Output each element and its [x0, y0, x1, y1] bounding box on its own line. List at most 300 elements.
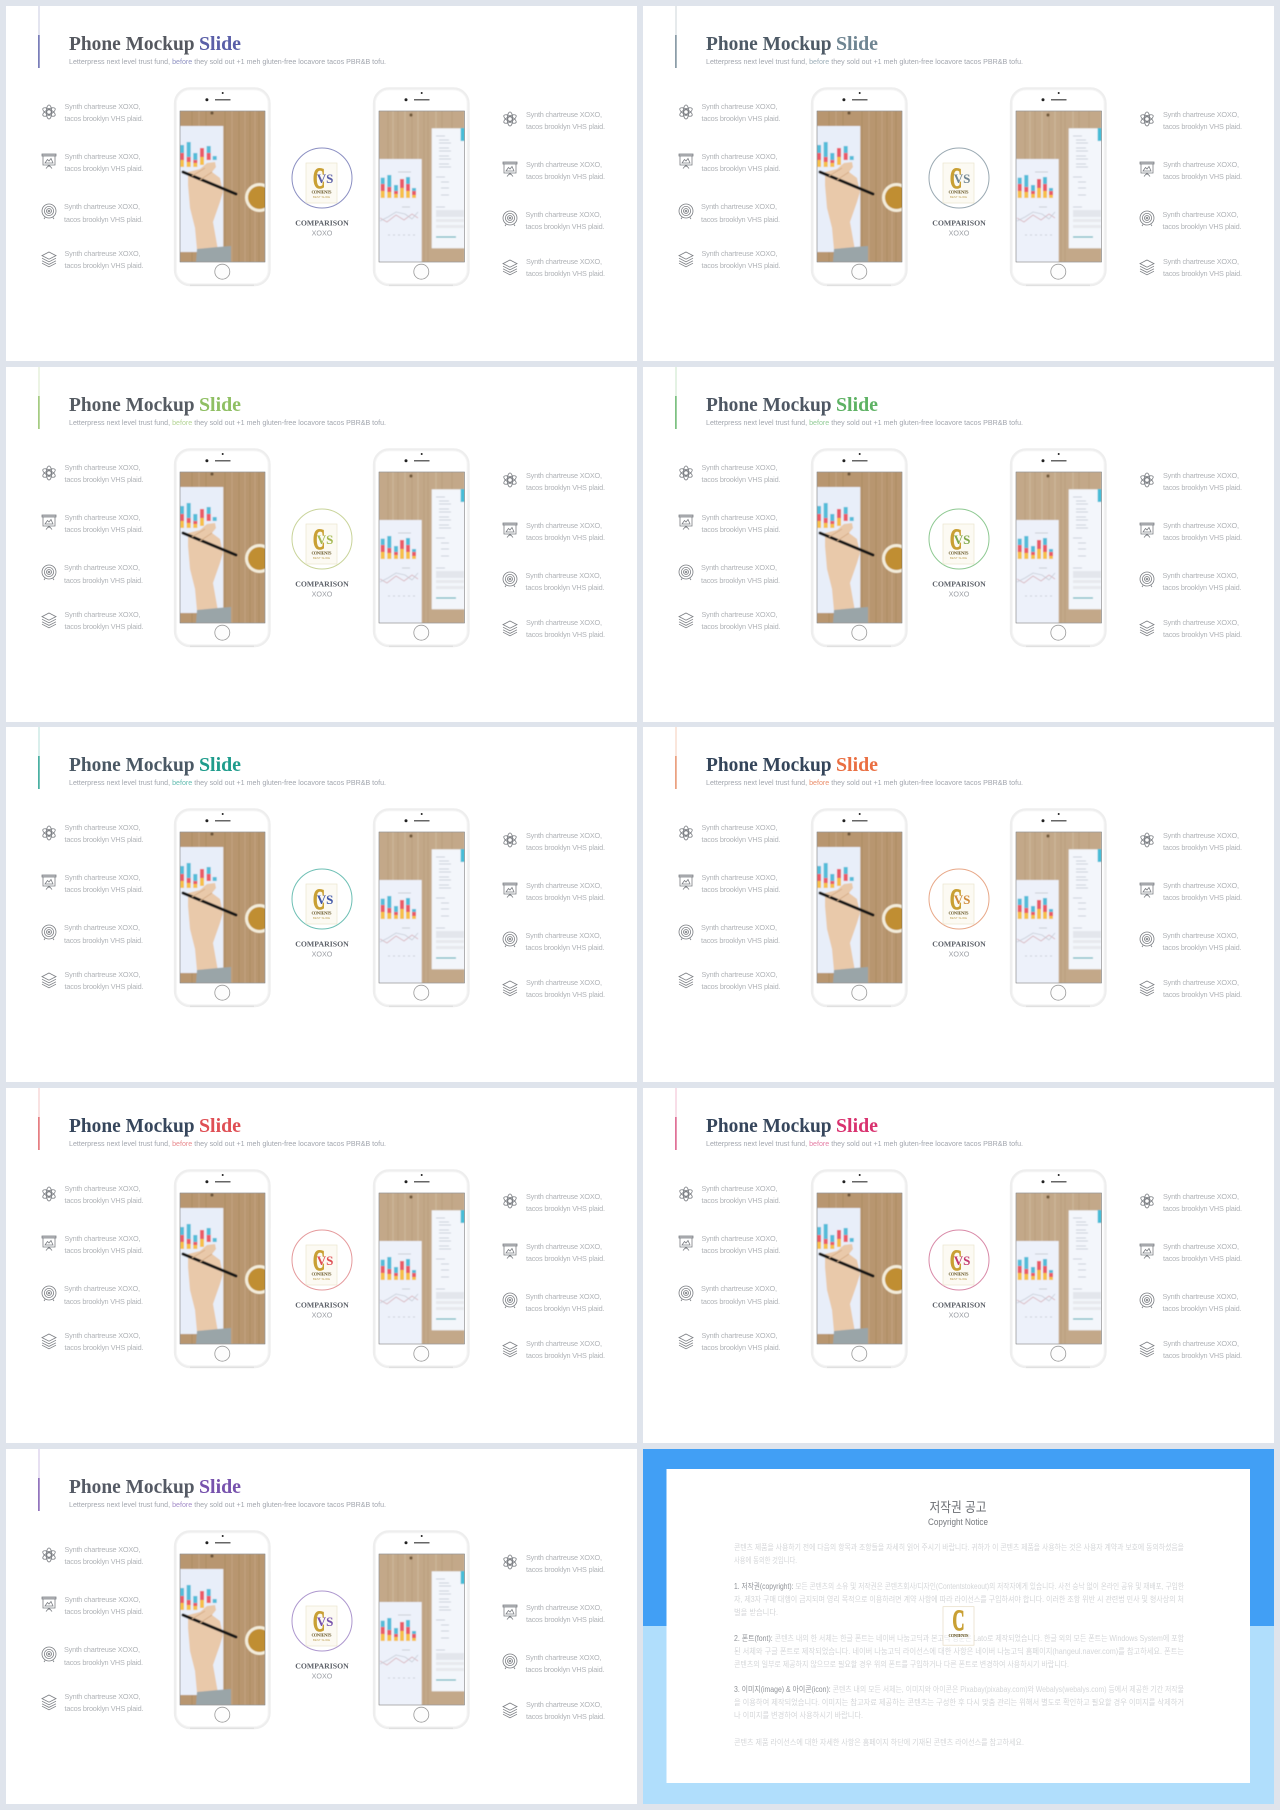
right feature list: tacos brooklyn VHS plaid.: [526, 1304, 604, 1313]
vs badge: C: [950, 523, 962, 556]
right feature list: tacos brooklyn VHS plaid.: [1163, 990, 1242, 999]
right feature list: tacos brooklyn VHS plaid.: [526, 1204, 605, 1213]
right feature list: Synth chartreuse XOXO,: [1162, 931, 1238, 940]
vs badge: BEST SLIDE: [313, 916, 330, 920]
phone: hand drawing chart: [174, 1532, 274, 1728]
left feature list: Synth chartreuse XOXO,: [64, 102, 140, 111]
vs badge: VS: [954, 171, 970, 186]
panel: slide 2 slate: [643, 6, 1274, 361]
left feature list: Synth chartreuse XOXO,: [64, 1284, 140, 1293]
contents logo: CONTENTS: [948, 1633, 969, 1638]
phone: paper report: [373, 1170, 470, 1367]
vs badge: VS: [954, 532, 970, 547]
vs badge: CONTENTS: [948, 190, 969, 194]
comparison label: [295, 940, 349, 958]
left feature list: tacos brooklyn VHS plaid.: [702, 622, 780, 631]
phone: hand drawing chart: [811, 1170, 911, 1367]
heading: Slide: [199, 1476, 241, 1498]
right feature list: tacos brooklyn VHS plaid.: [526, 222, 604, 231]
right feature list: Synth chartreuse XOXO,: [1163, 1242, 1239, 1251]
vs badge: BEST SLIDE: [313, 195, 330, 199]
right feature list: [1140, 1192, 1242, 1360]
left feature list: tacos brooklyn VHS plaid.: [64, 1658, 143, 1667]
vs badge: [929, 509, 989, 569]
copyright clause 1: 1. 저작권(copyright): 모든 콘텐츠의 소유 및 저작권은 콘텐츠회사/디자인(Contentstokeout)의 저작자에게 있습니다. 사전 승낙 없이 온라인 공유 및 재배포, 구입한: [734, 1581, 1185, 1591]
contents logo: [943, 1604, 974, 1645]
comparison label: [295, 580, 349, 598]
vs badge: CONTENTS: [948, 1272, 969, 1276]
left feature list: Synth chartreuse XOXO,: [702, 152, 778, 161]
phone: paper report: [373, 1532, 470, 1728]
right feature list: Synth chartreuse XOXO,: [1163, 1339, 1239, 1348]
copyright clause 3: 을 이용하여 제작되었습니다. 이미지는 참고자료 제공하는 콘텐츠는 구성한 후 다시 맞춤 관리는 위해서 별도로 확인하고 필요할 경우 이미지를 삭제하거: [734, 1697, 1184, 1707]
contents logo: C: [952, 1604, 964, 1637]
right feature list: Synth chartreuse XOXO,: [526, 521, 602, 530]
left feature list: Synth chartreuse XOXO,: [64, 970, 140, 979]
vs badge: CONTENTS: [948, 910, 969, 916]
left feature list: tacos brooklyn VHS plaid.: [64, 475, 144, 484]
copyright clause 1: 자, 제3자 구매 대행이 금지되며 영리 목적으로 이용하려면 계약 사항에 따라 라이선스를 구입하셔야 합니다. 이러한 조항 위반 시 관련법 민사 및 형사상의 처: [734, 1594, 1184, 1604]
left feature list: [679, 102, 780, 270]
left feature list: [42, 463, 143, 631]
right feature list: tacos brooklyn VHS plaid.: [1163, 483, 1242, 492]
phone: paper report: [1010, 88, 1107, 285]
left feature list: Synth chartreuse XOXO,: [701, 1284, 777, 1293]
vs badge: [292, 148, 352, 208]
right feature list: tacos brooklyn VHS plaid.: [1163, 843, 1242, 852]
left feature list: tacos brooklyn VHS plaid.: [64, 936, 143, 945]
right feature list: Synth chartreuse XOXO,: [1163, 521, 1239, 530]
phone: paper report: [1010, 810, 1107, 1006]
left feature list: tacos brooklyn VHS plaid.: [64, 1607, 144, 1616]
vs badge: BEST SLIDE: [313, 1277, 330, 1281]
heading: Slide: [199, 33, 241, 55]
panel: slide 5 teal: [6, 727, 637, 1082]
vs badge: C: [313, 1605, 325, 1638]
comparison label: COMPARISON: [295, 1662, 349, 1670]
subtitle: Letterpress next level trust fund, before they sold out +1 meh gluten-free locavore tacos PBR&B tofu.: [706, 1141, 1023, 1148]
comparison label: [295, 1300, 349, 1320]
phone: paper report: [373, 450, 470, 646]
comparison label: XOXO: [949, 1310, 970, 1320]
subtitle: Letterpress next level trust fund, before they sold out +1 meh gluten-free locavore tacos PBR&B tofu.: [69, 1141, 386, 1148]
right feature list: Synth chartreuse XOXO,: [526, 1603, 602, 1612]
left feature list: tacos brooklyn VHS plaid.: [64, 576, 143, 585]
right feature list: [503, 831, 605, 999]
right feature list: tacos brooklyn VHS plaid.: [526, 893, 605, 902]
vs badge: C: [950, 162, 962, 195]
comparison label: [932, 580, 986, 598]
left feature list: [679, 823, 780, 991]
comparison label: XOXO: [312, 228, 333, 238]
left feature list: Synth chartreuse XOXO,: [64, 463, 140, 472]
comparison label: [932, 1300, 986, 1320]
right feature list: Synth chartreuse XOXO,: [526, 1553, 602, 1562]
left feature list: Synth chartreuse XOXO,: [701, 923, 777, 932]
vs badge: BEST SLIDE: [950, 916, 967, 920]
left feature list: tacos brooklyn VHS plaid.: [64, 1343, 144, 1352]
left feature list: tacos brooklyn VHS plaid.: [64, 261, 144, 270]
left feature list: Synth chartreuse XOXO,: [702, 249, 778, 258]
vs badge: [292, 509, 352, 569]
right feature list: Synth chartreuse XOXO,: [526, 831, 602, 840]
heading: Slide: [836, 33, 878, 55]
copyright heading: [928, 1500, 988, 1527]
left feature list: tacos brooklyn VHS plaid.: [702, 1246, 780, 1255]
phone: paper report: [1010, 450, 1107, 646]
panel: slide 9 purple: [6, 1449, 637, 1804]
right feature list: Synth chartreuse XOXO,: [526, 110, 602, 119]
right feature list: tacos brooklyn VHS plaid.: [1163, 1254, 1242, 1263]
left feature list: Synth chartreuse XOXO,: [701, 202, 777, 211]
left feature list: tacos brooklyn VHS plaid.: [64, 525, 144, 534]
left feature list: [679, 463, 780, 631]
left feature list: tacos brooklyn VHS plaid.: [64, 114, 144, 123]
comparison label: XOXO: [949, 228, 970, 238]
vs badge: [292, 1230, 352, 1290]
left feature list: tacos brooklyn VHS plaid.: [702, 114, 780, 123]
right feature list: Synth chartreuse XOXO,: [1163, 618, 1239, 627]
right feature list: Synth chartreuse XOXO,: [526, 1242, 602, 1251]
heading: Slide: [199, 394, 241, 416]
left feature list: [679, 1184, 780, 1352]
panel: slide 1 indigo: [6, 6, 637, 361]
right feature list: Synth chartreuse XOXO,: [526, 257, 602, 266]
left feature list: Synth chartreuse XOXO,: [64, 152, 140, 161]
comparison label: COMPARISON: [932, 940, 986, 948]
panel: slide 7 red: [6, 1088, 637, 1443]
phone: paper report: [373, 88, 470, 285]
right feature list: tacos brooklyn VHS plaid.: [1163, 269, 1242, 278]
right feature list: tacos brooklyn VHS plaid.: [1163, 172, 1242, 181]
right feature list: tacos brooklyn VHS plaid.: [1163, 1204, 1242, 1213]
vs badge: CONTENTS: [312, 550, 332, 556]
phone: hand drawing chart: [174, 1170, 274, 1367]
vs badge: [929, 1230, 989, 1290]
heading: Phone Mockup: [69, 1115, 195, 1137]
right feature list: tacos brooklyn VHS plaid.: [1162, 583, 1242, 592]
comparison label: [932, 218, 986, 238]
panel: slide 4 green: [643, 367, 1274, 722]
left feature list: Synth chartreuse XOXO,: [64, 1645, 140, 1654]
right feature list: tacos brooklyn VHS plaid.: [1163, 893, 1242, 902]
left feature list: [42, 1184, 143, 1352]
phone: hand drawing chart: [811, 810, 911, 1006]
right feature list: tacos brooklyn VHS plaid.: [526, 1565, 605, 1574]
vs badge: VS: [317, 1614, 333, 1629]
right feature list: Synth chartreuse XOXO,: [526, 1292, 602, 1301]
right feature list: Synth chartreuse XOXO,: [1163, 110, 1239, 119]
subtitle: Letterpress next level trust fund, before they sold out +1 meh gluten-free locavore tacos PBR&B tofu.: [69, 420, 386, 427]
vs badge: C: [313, 883, 325, 916]
left feature list: tacos brooklyn VHS plaid.: [702, 982, 780, 991]
right feature list: Synth chartreuse XOXO,: [526, 978, 602, 987]
right feature list: tacos brooklyn VHS plaid.: [526, 1351, 605, 1360]
left feature list: Synth chartreuse XOXO,: [64, 249, 140, 258]
left feature list: tacos brooklyn VHS plaid.: [701, 1297, 780, 1306]
vs badge: VS: [954, 1253, 970, 1268]
left feature list: Synth chartreuse XOXO,: [702, 1234, 778, 1243]
right feature list: [503, 1192, 605, 1360]
left feature list: tacos brooklyn VHS plaid.: [64, 1196, 144, 1205]
left feature list: tacos brooklyn VHS plaid.: [64, 1297, 143, 1306]
right feature list: tacos brooklyn VHS plaid.: [1163, 1351, 1242, 1360]
heading: Phone Mockup: [706, 1115, 832, 1137]
left feature list: [42, 1545, 143, 1713]
left feature list: Synth chartreuse XOXO,: [702, 610, 778, 619]
vs badge: CONTENTS: [948, 550, 969, 556]
comparison label: XOXO: [949, 950, 970, 958]
phone: hand drawing chart: [174, 810, 274, 1006]
right feature list: Synth chartreuse XOXO,: [1163, 160, 1239, 169]
left feature list: Synth chartreuse XOXO,: [64, 513, 140, 522]
copyright clause 2: 된 서체와 구글 폰트로 제작되었습니다. 네이버 나눔고딕 라이선스에 대한 사항은 네이버 나눔고딕 홈페이지(hangeul.naver.com)를 참고하세요. 폰트는: [734, 1646, 1184, 1656]
right feature list: tacos brooklyn VHS plaid.: [526, 269, 605, 278]
vs badge: VS: [954, 892, 970, 907]
right feature list: Synth chartreuse XOXO,: [1162, 571, 1238, 580]
right feature list: Synth chartreuse XOXO,: [1162, 210, 1238, 219]
right feature list: [503, 1553, 605, 1721]
right feature list: Synth chartreuse XOXO,: [526, 1339, 602, 1348]
vs badge: [929, 148, 989, 208]
right feature list: tacos brooklyn VHS plaid.: [1163, 122, 1242, 131]
heading: Slide: [199, 754, 241, 776]
comparison label: COMPARISON: [295, 940, 349, 948]
right feature list: tacos brooklyn VHS plaid.: [526, 1712, 605, 1721]
left feature list: [42, 823, 143, 991]
left feature list: Synth chartreuse XOXO,: [702, 102, 778, 111]
left feature list: tacos brooklyn VHS plaid.: [64, 835, 144, 844]
right feature list: Synth chartreuse XOXO,: [526, 1700, 602, 1709]
right feature list: tacos brooklyn VHS plaid.: [526, 583, 604, 592]
right feature list: tacos brooklyn VHS plaid.: [526, 483, 605, 492]
left feature list: tacos brooklyn VHS plaid.: [702, 525, 780, 534]
vs badge: VS: [317, 532, 333, 547]
panel: copyright notice: [643, 1449, 1274, 1804]
right feature list: Synth chartreuse XOXO,: [526, 210, 602, 219]
left feature list: Synth chartreuse XOXO,: [702, 873, 778, 882]
vs badge: CONTENTS: [312, 910, 332, 916]
left feature list: tacos brooklyn VHS plaid.: [702, 261, 780, 270]
vs badge: [292, 1591, 352, 1651]
heading: Phone Mockup: [69, 394, 195, 416]
vs badge: BEST SLIDE: [313, 1638, 330, 1642]
left feature list: tacos brooklyn VHS plaid.: [64, 1704, 144, 1713]
subtitle: Letterpress next level trust fund, before they sold out +1 meh gluten-free locavore tacos PBR&B tofu.: [69, 780, 386, 787]
right feature list: Synth chartreuse XOXO,: [526, 1653, 602, 1662]
comparison label: XOXO: [312, 590, 333, 598]
vs badge: CONTENTS: [312, 1632, 332, 1638]
phone: paper report: [1010, 1170, 1107, 1367]
right feature list: Synth chartreuse XOXO,: [1163, 471, 1239, 480]
right feature list: tacos brooklyn VHS plaid.: [526, 843, 605, 852]
phone: hand drawing chart: [811, 88, 911, 285]
left feature list: tacos brooklyn VHS plaid.: [702, 475, 780, 484]
right feature list: tacos brooklyn VHS plaid.: [526, 1615, 605, 1624]
heading: Phone Mockup: [706, 33, 832, 55]
right feature list: tacos brooklyn VHS plaid.: [526, 1665, 604, 1674]
left feature list: tacos brooklyn VHS plaid.: [701, 936, 780, 945]
copyright clause 3: 3. 이미지(image) & 아이콘(icon): 콘텐츠 내의 모든 서체는, 이미지와 아이콘은 Pixabay(pixabay.com)와 Webalys(webalys.com) 등에서 제공한 기간 저작물: [734, 1684, 1184, 1694]
copyright clause 2: 2. 폰트(font): 콘텐츠 내의 한 서체는 한글 폰트는 네이버 나눔고딕과 본고딕 영문은 Lato로 제작되었습니다. 한글 외의 모든 폰트는 Windows System에 포함: [734, 1633, 1185, 1643]
left feature list: tacos brooklyn VHS plaid.: [64, 885, 144, 894]
left feature list: Synth chartreuse XOXO,: [64, 823, 140, 832]
right feature list: tacos brooklyn VHS plaid.: [526, 943, 604, 952]
copyright clause 1: [734, 1581, 1185, 1617]
subtitle: Letterpress next level trust fund, before they sold out +1 meh gluten-free locavore tacos PBR&B tofu.: [706, 420, 1023, 427]
phone: hand drawing chart: [174, 450, 274, 646]
vs badge: VS: [317, 892, 333, 907]
right feature list: Synth chartreuse XOXO,: [1163, 1192, 1239, 1201]
phone: hand drawing chart: [174, 88, 274, 285]
vs badge: C: [313, 162, 325, 195]
right feature list: Synth chartreuse XOXO,: [1163, 881, 1239, 890]
comparison label: COMPARISON: [295, 218, 349, 228]
vs badge: VS: [317, 171, 333, 186]
comparison label: COMPARISON: [932, 580, 986, 588]
left feature list: tacos brooklyn VHS plaid.: [702, 1343, 780, 1352]
heading: Phone Mockup: [69, 33, 195, 55]
comparison label: XOXO: [312, 1310, 333, 1320]
right feature list: Synth chartreuse XOXO,: [1163, 831, 1239, 840]
right feature list: Synth chartreuse XOXO,: [526, 931, 602, 940]
right feature list: Synth chartreuse XOXO,: [526, 881, 602, 890]
right feature list: tacos brooklyn VHS plaid.: [1162, 222, 1242, 231]
left feature list: Synth chartreuse XOXO,: [701, 563, 777, 572]
phone: hand drawing chart: [811, 450, 911, 646]
copyright heading: Copyright Notice: [928, 1517, 988, 1527]
comparison label: [295, 1662, 349, 1680]
left feature list: tacos brooklyn VHS plaid.: [64, 164, 144, 173]
right feature list: tacos brooklyn VHS plaid.: [526, 990, 605, 999]
left feature list: tacos brooklyn VHS plaid.: [64, 982, 144, 991]
right feature list: tacos brooklyn VHS plaid.: [1162, 1304, 1242, 1313]
subtitle: Letterpress next level trust fund, before they sold out +1 meh gluten-free locavore tacos PBR&B tofu.: [706, 59, 1023, 66]
right feature list: tacos brooklyn VHS plaid.: [1163, 630, 1242, 639]
left feature list: Synth chartreuse XOXO,: [702, 463, 778, 472]
right feature list: [1140, 471, 1242, 639]
right feature list: Synth chartreuse XOXO,: [1163, 978, 1239, 987]
vs badge: [929, 869, 989, 929]
heading: Phone Mockup: [69, 754, 195, 776]
left feature list: Synth chartreuse XOXO,: [64, 1234, 140, 1243]
copyright clause 3: 나 이미지를 변경하여 사용하시기 바랍니다.: [734, 1710, 863, 1720]
vs badge: C: [950, 1244, 962, 1277]
left feature list: [42, 102, 143, 270]
comparison label: COMPARISON: [932, 1300, 986, 1310]
comparison label: [932, 940, 986, 958]
subtitle: Letterpress next level trust fund, before they sold out +1 meh gluten-free locavore tacos PBR&B tofu.: [69, 1502, 386, 1509]
left feature list: tacos brooklyn VHS plaid.: [64, 215, 143, 224]
subtitle: Letterpress next level trust fund, before they sold out +1 meh gluten-free locavore tacos PBR&B tofu.: [69, 59, 386, 66]
left feature list: Synth chartreuse XOXO,: [702, 1331, 778, 1340]
left feature list: Synth chartreuse XOXO,: [64, 610, 140, 619]
left feature list: Synth chartreuse XOXO,: [702, 823, 778, 832]
left feature list: Synth chartreuse XOXO,: [64, 1331, 140, 1340]
right feature list: [1140, 110, 1242, 278]
comparison label: COMPARISON: [295, 580, 349, 588]
left feature list: tacos brooklyn VHS plaid.: [702, 885, 780, 894]
heading: Slide: [836, 754, 878, 776]
right feature list: tacos brooklyn VHS plaid.: [1163, 533, 1242, 542]
left feature list: tacos brooklyn VHS plaid.: [701, 215, 780, 224]
left feature list: tacos brooklyn VHS plaid.: [702, 164, 780, 173]
copyright clause 2: 콘텐츠의 일부로 제공하지 않으므로 필요할 경우 위의 폰트를 구입하거나 다른 폰트로 변경하여 사용하시기 바랍니다.: [734, 1659, 1069, 1669]
panel: slide 6 orange: [643, 727, 1274, 1082]
vs badge: BEST SLIDE: [950, 556, 967, 560]
right feature list: [503, 471, 605, 639]
vs badge: CONTENTS: [312, 190, 332, 194]
left feature list: tacos brooklyn VHS plaid.: [64, 1557, 144, 1566]
heading: Phone Mockup: [69, 1476, 195, 1498]
copyright clause 1: 벌을 받습니다.: [734, 1607, 778, 1617]
right feature list: [503, 110, 605, 278]
copyright intro: 사용에 동의한 것입니다.: [734, 1555, 797, 1565]
heading: Slide: [836, 1115, 878, 1137]
copyright clause 2: [734, 1633, 1185, 1669]
panel: slide 8 pink: [643, 1088, 1274, 1443]
comparison label: XOXO: [312, 950, 333, 958]
right feature list: Synth chartreuse XOXO,: [526, 471, 602, 480]
comparison label: COMPARISON: [932, 218, 986, 228]
right feature list: Synth chartreuse XOXO,: [526, 160, 602, 169]
right feature list: tacos brooklyn VHS plaid.: [526, 122, 605, 131]
heading: Phone Mockup: [706, 754, 832, 776]
right feature list: tacos brooklyn VHS plaid.: [1162, 943, 1242, 952]
left feature list: tacos brooklyn VHS plaid.: [64, 622, 144, 631]
right feature list: tacos brooklyn VHS plaid.: [526, 630, 605, 639]
panel: slide 3 lime: [6, 367, 637, 722]
left feature list: Synth chartreuse XOXO,: [64, 923, 140, 932]
left feature list: Synth chartreuse XOXO,: [702, 513, 778, 522]
comparison label: XOXO: [949, 590, 970, 598]
vs badge: C: [313, 1244, 325, 1277]
vs badge: C: [950, 883, 962, 916]
right feature list: Synth chartreuse XOXO,: [1162, 1292, 1238, 1301]
left feature list: Synth chartreuse XOXO,: [64, 1184, 140, 1193]
vs badge: BEST SLIDE: [950, 195, 967, 199]
copyright heading: 저작권 공고: [930, 1500, 986, 1515]
left feature list: Synth chartreuse XOXO,: [64, 1595, 140, 1604]
right feature list: Synth chartreuse XOXO,: [526, 618, 602, 627]
heading: Slide: [836, 394, 878, 416]
comparison label: XOXO: [312, 1672, 333, 1680]
left feature list: Synth chartreuse XOXO,: [702, 970, 778, 979]
left feature list: Synth chartreuse XOXO,: [64, 873, 140, 882]
right feature list: tacos brooklyn VHS plaid.: [526, 172, 605, 181]
vs badge: [292, 869, 352, 929]
vs badge: C: [313, 523, 325, 556]
heading: Slide: [199, 1115, 241, 1137]
left feature list: tacos brooklyn VHS plaid.: [701, 576, 780, 585]
left feature list: Synth chartreuse XOXO,: [64, 1545, 140, 1554]
left feature list: tacos brooklyn VHS plaid.: [64, 1246, 144, 1255]
right feature list: Synth chartreuse XOXO,: [1163, 257, 1239, 266]
left feature list: Synth chartreuse XOXO,: [64, 202, 140, 211]
left feature list: Synth chartreuse XOXO,: [702, 1184, 778, 1193]
vs badge: CONTENTS: [312, 1272, 332, 1276]
right feature list: Synth chartreuse XOXO,: [526, 1192, 602, 1201]
right feature list: Synth chartreuse XOXO,: [526, 571, 602, 580]
left feature list: Synth chartreuse XOXO,: [64, 563, 140, 572]
vs badge: BEST SLIDE: [950, 1277, 967, 1281]
left feature list: tacos brooklyn VHS plaid.: [702, 835, 780, 844]
copyright clause 3: [734, 1684, 1184, 1720]
phone: paper report: [373, 810, 470, 1006]
copyright intro: 콘텐츠 제품을 사용하기 전에 다음의 항목과 조항들을 자세히 읽어 주시기 바랍니다. 귀하가 이 콘텐츠 제품을 사용하는 것은 사용자 계약과 보호에 동의하셨음을: [734, 1542, 1184, 1552]
copyright intro: [734, 1542, 1184, 1565]
comparison label: COMPARISON: [295, 1300, 349, 1310]
